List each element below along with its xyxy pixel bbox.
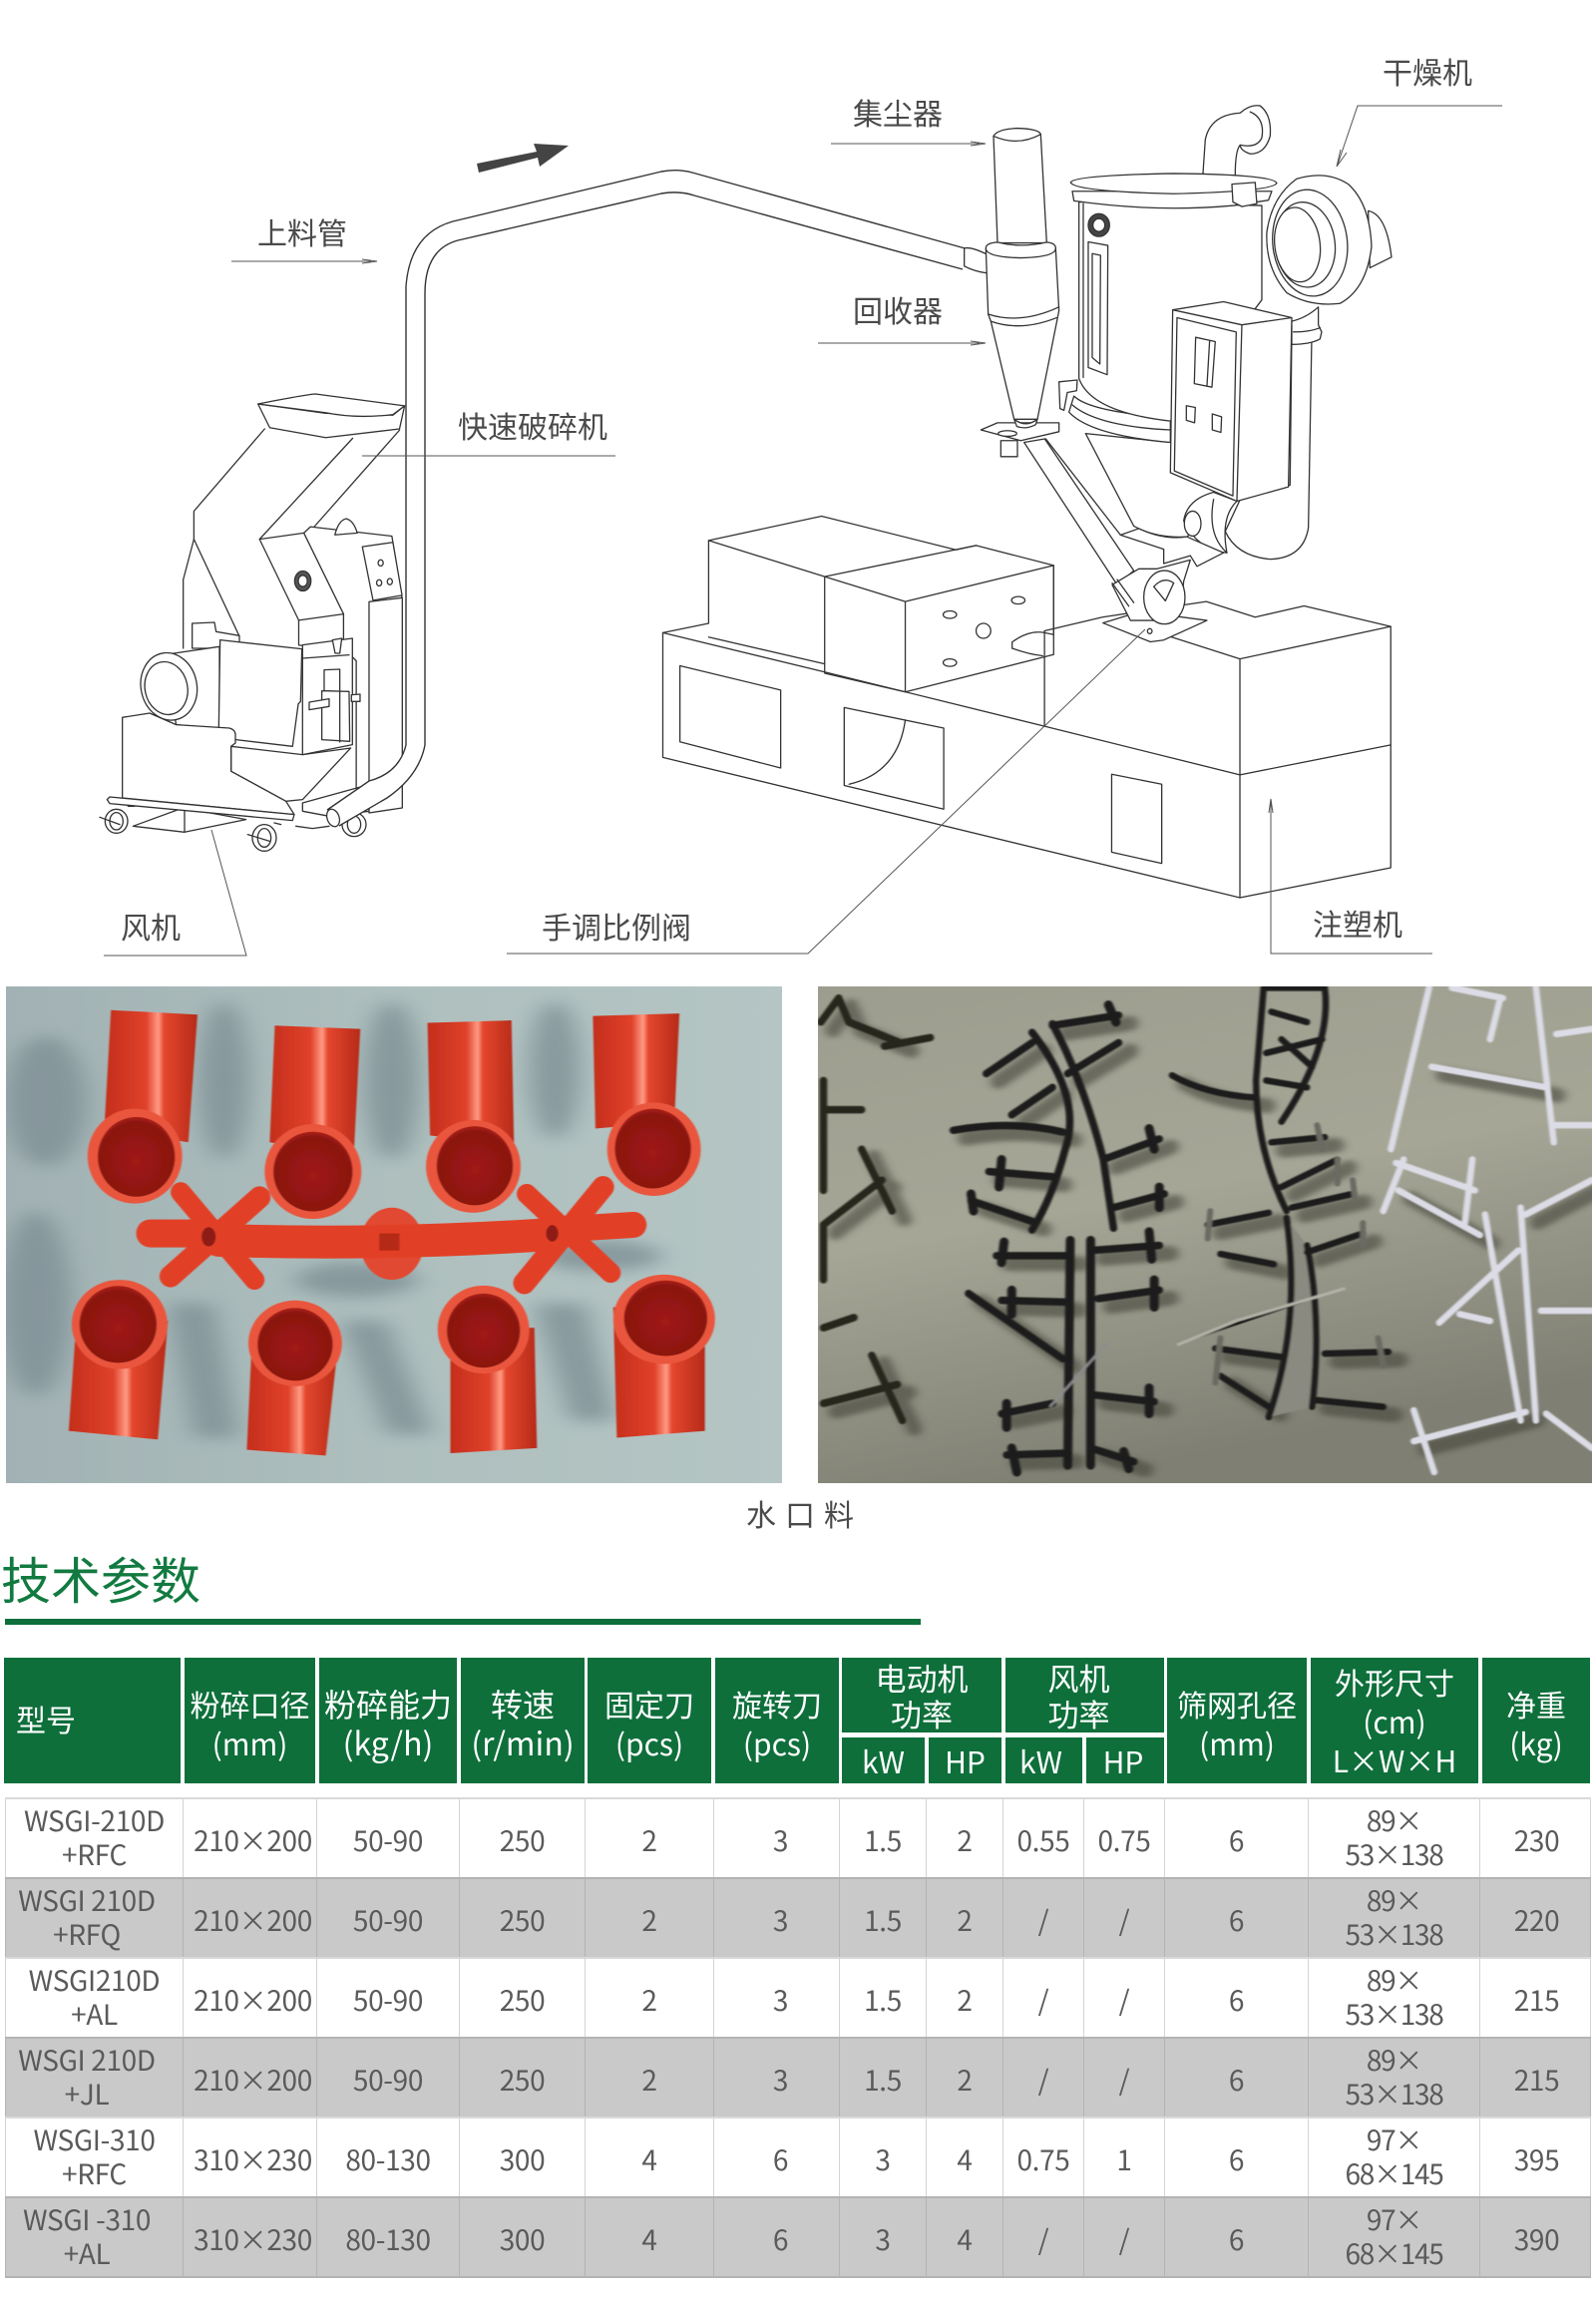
row: WSGI -310 +AL: 300 [500,2218,545,2258]
row: WSGI 210D +RFQ: 1.5 [864,1899,902,1939]
photo: black and white plastic sprues [818,986,1592,1483]
row: WSGI -310 +AL: 310×230 [194,2218,312,2258]
row: WSGI -310 +AL: 4 [641,2218,657,2258]
table header: 功率 [891,1690,953,1735]
leader lines [104,106,1502,956]
row: WSGI-210D +RFC: 3 [773,1819,788,1859]
row: WSGI210D +AL: 215 [1514,1979,1559,2019]
row: WSGI210D +AL: 250 [500,1979,545,2019]
row: WSGI 210D +RFQ: 53×138 [1346,1913,1442,1953]
row: WSGI-310 +RFC: 97× [1367,2118,1421,2158]
label: 手调比例阀: 手调比例阀 [542,904,691,948]
row: WSGI 210D +JL: 6 [1229,2059,1244,2099]
row: WSGI210D +AL: 6 [1229,1979,1244,2019]
dust collector and recovery cyclone [965,129,1059,457]
row: WSGI 210D +RFQ: / [1038,1899,1048,1939]
label: 注塑机: 注塑机 [1313,901,1402,945]
row: WSGI210D +AL [5,1957,1591,2037]
row: WSGI-310 +RFC: 3 [875,2138,891,2178]
table header: (pcs) [615,1720,683,1763]
row: WSGI-310 +RFC: 1 [1116,2138,1132,2178]
row: WSGI-310 +RFC: 300 [500,2138,545,2178]
row: WSGI 210D +JL [5,2037,1591,2117]
row: WSGI 210D +JL: 53×138 [1346,2073,1442,2113]
hopper dryer with blower [1059,106,1392,560]
row: WSGI -310 +AL: / [1119,2218,1129,2258]
row: WSGI-210D +RFC: 6 [1229,1819,1244,1859]
row: WSGI-310 +RFC: 6 [773,2138,788,2178]
label: 风机: 风机 [121,904,181,948]
row: WSGI-310 +RFC [5,2117,1591,2196]
row: WSGI-210D +RFC [5,1797,1591,1877]
row: WSGI210D +AL: 50-90 [353,1979,423,2019]
row: WSGI-210D +RFC: 1.5 [864,1819,902,1859]
table header: (pcs) [743,1720,811,1763]
table header: 粉碎口径 [190,1682,309,1726]
row: WSGI 210D +RFQ: 250 [500,1899,545,1939]
row: WSGI-310 +RFC: 68×145 [1346,2152,1442,2192]
row: WSGI 210D +JL: / [1119,2059,1129,2099]
feed pipe [324,171,969,829]
row: WSGI210D +AL: / [1038,1979,1048,2019]
row: WSGI 210D +RFQ: 50-90 [353,1899,423,1939]
shadows [0,1001,661,1437]
row: WSGI 210D +RFQ: 2 [957,1899,973,1939]
row: WSGI210D +AL: 3 [773,1979,788,2019]
row: WSGI -310 +AL [5,2196,1591,2278]
row: WSGI-310 +RFC: 395 [1514,2138,1559,2178]
dark and white sprues [821,987,1592,1472]
row: WSGI 210D +JL: 2 [957,2059,973,2099]
row: WSGI-210D +RFC: 2 [641,1819,657,1859]
table header: kW [862,1737,905,1781]
flow arrow [477,144,569,173]
table header: (kg/h) [343,1720,433,1765]
table header: 外形尺寸 [1335,1660,1454,1704]
row: WSGI-310 +RFC: WSGI-310 [33,2118,156,2158]
table header: 转速 [491,1680,555,1726]
row: WSGI 210D +RFQ [5,1877,1591,1957]
row: WSGI-210D +RFC: 89× [1367,1799,1421,1839]
row: WSGI-210D +RFC: 250 [500,1819,545,1859]
table header: 净重 [1506,1682,1566,1726]
row: WSGI-210D +RFC: +RFC [62,1833,127,1873]
row: WSGI 210D +JL: 1.5 [864,2059,902,2099]
row: WSGI-210D +RFC: 0.55 [1016,1819,1069,1859]
table header: L×W×H [1333,1737,1456,1781]
row: WSGI-310 +RFC: 4 [957,2138,973,2178]
table header: (kg) [1509,1720,1563,1763]
row: WSGI -310 +AL: 68×145 [1346,2232,1442,2272]
row: WSGI-210D +RFC: 53×138 [1346,1833,1442,1873]
label: 快速破碎机: 快速破碎机 [458,403,607,447]
table header: HP [1103,1737,1143,1781]
row: WSGI-210D +RFC: 210×200 [194,1819,312,1859]
row: WSGI -310 +AL: 6 [1229,2218,1244,2258]
row: WSGI 210D +JL: 3 [773,2059,788,2099]
rapid crusher upper body [184,394,405,807]
table rows [5,1797,1591,2278]
row: WSGI210D +AL: 210×200 [194,1979,312,2019]
row: WSGI-310 +RFC: +RFC [62,2152,127,2192]
heading underline [5,1619,921,1625]
row: WSGI-210D +RFC: WSGI-210D [24,1799,165,1839]
row: WSGI -310 +AL: 6 [773,2218,788,2258]
moulded red fittings [69,1010,715,1455]
row: WSGI-210D +RFC: 50-90 [353,1819,423,1859]
row: WSGI 210D +JL: WSGI 210D [18,2039,156,2079]
table header [4,1654,1590,1783]
label: 集尘器: 集尘器 [853,90,943,134]
row: WSGI -310 +AL: +AL [64,2232,110,2272]
row: WSGI -310 +AL: 4 [957,2218,973,2258]
row: WSGI -310 +AL: 97× [1367,2198,1421,2238]
row: WSGI-310 +RFC: 310×230 [194,2138,312,2178]
label: 上料管: 上料管 [257,209,347,253]
table header: 功率 [1047,1690,1109,1735]
row: WSGI 210D +RFQ: / [1119,1899,1129,1939]
row: WSGI 210D +JL: 250 [500,2059,545,2099]
row: WSGI210D +AL: 89× [1367,1959,1421,1999]
table header: 筛网孔径 [1177,1682,1297,1726]
table header: kW [1019,1737,1062,1781]
row: WSGI-310 +RFC: 4 [641,2138,657,2178]
dark sprue shadows [833,1006,1596,1470]
row: WSGI 210D +JL: 210×200 [194,2059,312,2099]
row: WSGI-210D +RFC: 2 [957,1819,973,1859]
panel: process diagram [99,49,1502,956]
row: WSGI210D +AL: +AL [71,1993,118,2033]
table header: 粉碎能力 [324,1680,452,1726]
table header: (mm) [1199,1720,1275,1763]
table header: (cm) [1363,1698,1426,1741]
row: WSGI-210D +RFC: 0.75 [1097,1819,1151,1859]
table header: 旋转刀 [732,1682,822,1726]
injection moulding machine [662,517,1391,898]
proportional valve and feed chute [1024,439,1224,642]
row: WSGI 210D +RFQ: 220 [1514,1899,1559,1939]
row: WSGI 210D +JL: / [1038,2059,1048,2099]
row: WSGI 210D +JL: 89× [1367,2039,1421,2079]
row: WSGI-310 +RFC: 0.75 [1016,2138,1069,2178]
row: WSGI210D +AL: 2 [641,1979,657,2019]
table header: (r/min) [471,1720,575,1765]
row: WSGI210D +AL: 2 [957,1979,973,2019]
label: 回收器: 回收器 [853,287,943,331]
row: WSGI 210D +RFQ: 2 [641,1899,657,1939]
caption: sprue material: 水口料 [746,1491,863,1535]
row: WSGI 210D +JL: 215 [1514,2059,1559,2099]
row: WSGI -310 +AL: 390 [1514,2218,1559,2258]
row: WSGI -310 +AL: 3 [875,2218,891,2258]
row: WSGI 210D +JL: +JL [65,2073,109,2113]
row: WSGI 210D +RFQ: WSGI 210D [18,1879,156,1919]
row: WSGI -310 +AL: 80-130 [345,2218,431,2258]
rapid crusher lower body [100,597,402,851]
row: WSGI 210D +RFQ: 3 [773,1899,788,1939]
table header: (mm) [212,1720,287,1763]
table header: 风机 [1047,1654,1109,1700]
row: WSGI 210D +RFQ: +RFQ [53,1913,121,1953]
row: WSGI210D +AL: 1.5 [864,1979,902,2019]
heading: technical parameters: 技术参数 [1,1542,200,1614]
photo: red pipe fittings sprue [6,986,782,1483]
table header: 电动机 [876,1654,968,1700]
row: WSGI-310 +RFC: 80-130 [345,2138,431,2178]
table header: 型号 [16,1696,76,1739]
label: 干燥机: 干燥机 [1383,49,1472,93]
row: WSGI-210D +RFC: 230 [1514,1819,1559,1859]
row: WSGI -310 +AL: WSGI -310 [23,2198,151,2238]
row: WSGI210D +AL: / [1119,1979,1129,2019]
row: WSGI210D +AL: WSGI210D [29,1959,160,1999]
row: WSGI -310 +AL: / [1038,2218,1048,2258]
row: WSGI 210D +RFQ: 89× [1367,1879,1421,1919]
table header: HP [945,1737,986,1781]
row: WSGI 210D +RFQ: 6 [1229,1899,1244,1939]
table header: 固定刀 [604,1682,694,1726]
row: WSGI 210D +RFQ: 210×200 [194,1899,312,1939]
row: WSGI 210D +JL: 50-90 [353,2059,423,2099]
row: WSGI210D +AL: 53×138 [1346,1993,1442,2033]
row: WSGI-310 +RFC: 6 [1229,2138,1244,2178]
row: WSGI 210D +JL: 2 [641,2059,657,2099]
